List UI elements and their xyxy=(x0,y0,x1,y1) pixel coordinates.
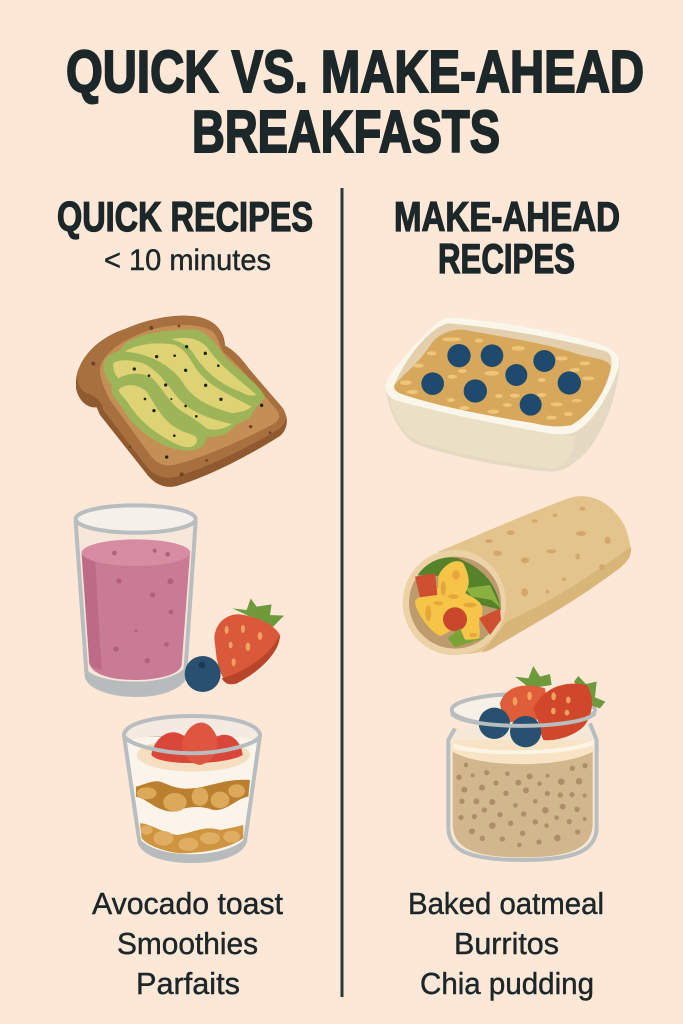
list: make-ahead recipes xyxy=(408,886,604,1001)
column divider xyxy=(340,188,344,997)
icon: baked oatmeal dish xyxy=(386,318,620,472)
heading: quick recipes: < 10 minutes xyxy=(104,244,271,277)
heading: make-ahead recipes xyxy=(394,193,620,282)
list: quick recipes: Parfaits xyxy=(136,966,240,1001)
icon: burrito xyxy=(403,496,631,655)
icon: smoothie glass and berries xyxy=(76,505,284,695)
heading: quick recipes xyxy=(57,193,313,277)
icon: chia pudding jar xyxy=(448,666,605,860)
icon: parfait xyxy=(124,716,260,861)
title xyxy=(66,39,644,165)
title: BREAKFASTS xyxy=(192,99,500,165)
list: quick recipes: Smoothies xyxy=(117,926,258,961)
list: quick recipes: Avocado toast xyxy=(92,886,283,921)
heading: make-ahead recipes: RECIPES xyxy=(438,235,575,282)
heading: make-ahead recipes: MAKE-AHEAD xyxy=(394,193,620,240)
list: quick recipes xyxy=(92,886,283,1001)
heading: quick recipes: QUICK RECIPES xyxy=(57,193,313,240)
list: make-ahead recipes: Burritos xyxy=(454,926,559,961)
list: make-ahead recipes: Baked oatmeal xyxy=(408,886,604,921)
list: make-ahead recipes: Chia pudding xyxy=(420,966,594,1001)
icon: avocado toast xyxy=(76,316,287,487)
